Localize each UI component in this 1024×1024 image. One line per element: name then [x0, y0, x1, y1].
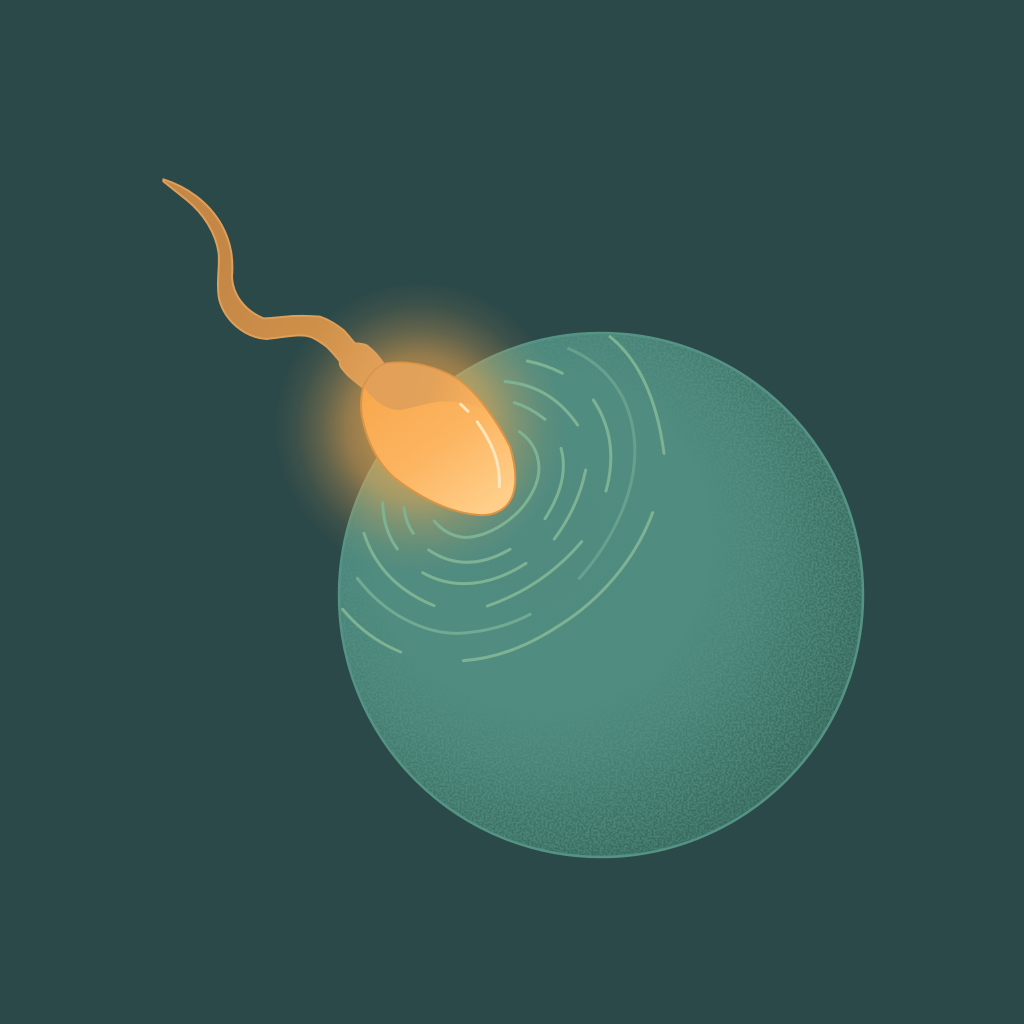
concentric ripple arcs: [343, 337, 664, 661]
illustration: sperm cell meeting an egg: [162, 178, 864, 858]
egg cell: [330, 325, 875, 870]
sperm head: [361, 362, 515, 515]
head cap: [364, 363, 488, 412]
head highlights: [461, 404, 499, 487]
glow around sperm head: [275, 283, 565, 573]
sperm tail: [163, 179, 390, 387]
